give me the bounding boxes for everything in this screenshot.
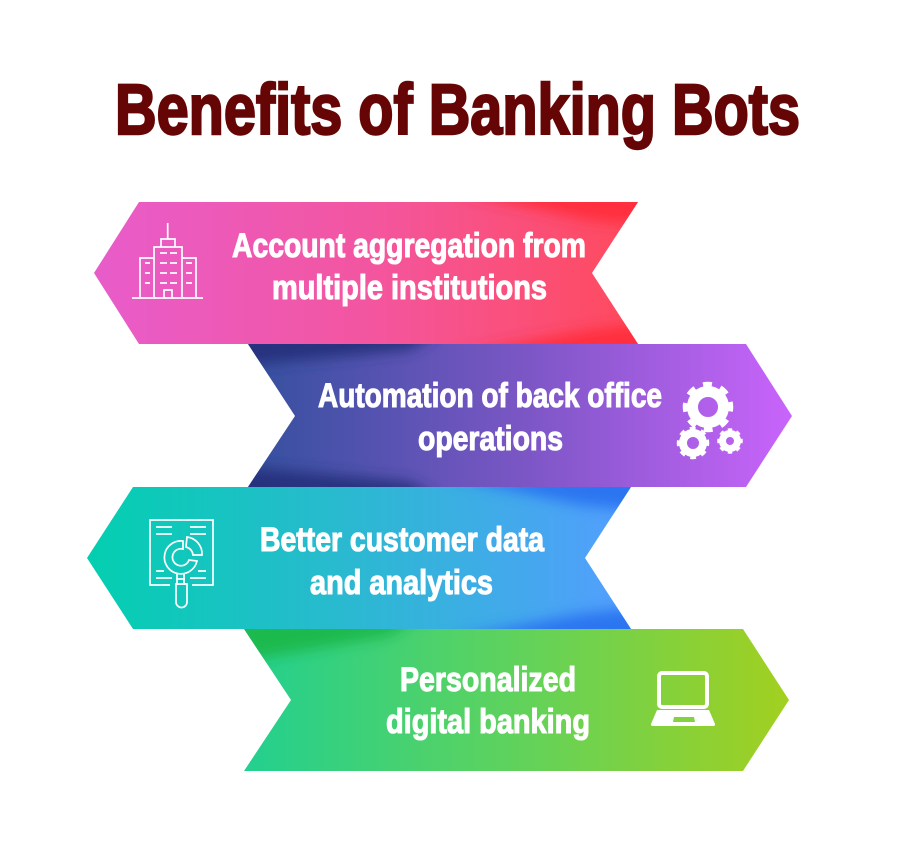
- icon: office building: [132, 223, 203, 298]
- text: personalized banking: Personalized: [400, 661, 576, 699]
- panel: account aggregation: [94, 202, 638, 344]
- panel: automation: [248, 344, 792, 487]
- icon: gears: [679, 384, 741, 457]
- panel: customer data: [87, 487, 631, 629]
- text: account aggregation: multiple institutions: [272, 269, 547, 307]
- text: automation: [318, 377, 662, 458]
- text: personalized banking: digital banking: [386, 703, 590, 741]
- text: customer data: [260, 521, 545, 602]
- text: account aggregation: Account aggregation from: [232, 227, 586, 265]
- text: automation: operations: [418, 420, 563, 458]
- text: personalized banking: [386, 661, 590, 741]
- text: automation: Automation of back office: [318, 377, 662, 415]
- icon: laptop: [651, 673, 715, 726]
- text: customer data: and analytics: [310, 564, 493, 602]
- text: account aggregation: [232, 227, 586, 307]
- panel: personalized banking: [244, 629, 789, 771]
- text: customer data: Better customer data: [260, 521, 545, 559]
- icon: report with magnifier: [150, 520, 213, 608]
